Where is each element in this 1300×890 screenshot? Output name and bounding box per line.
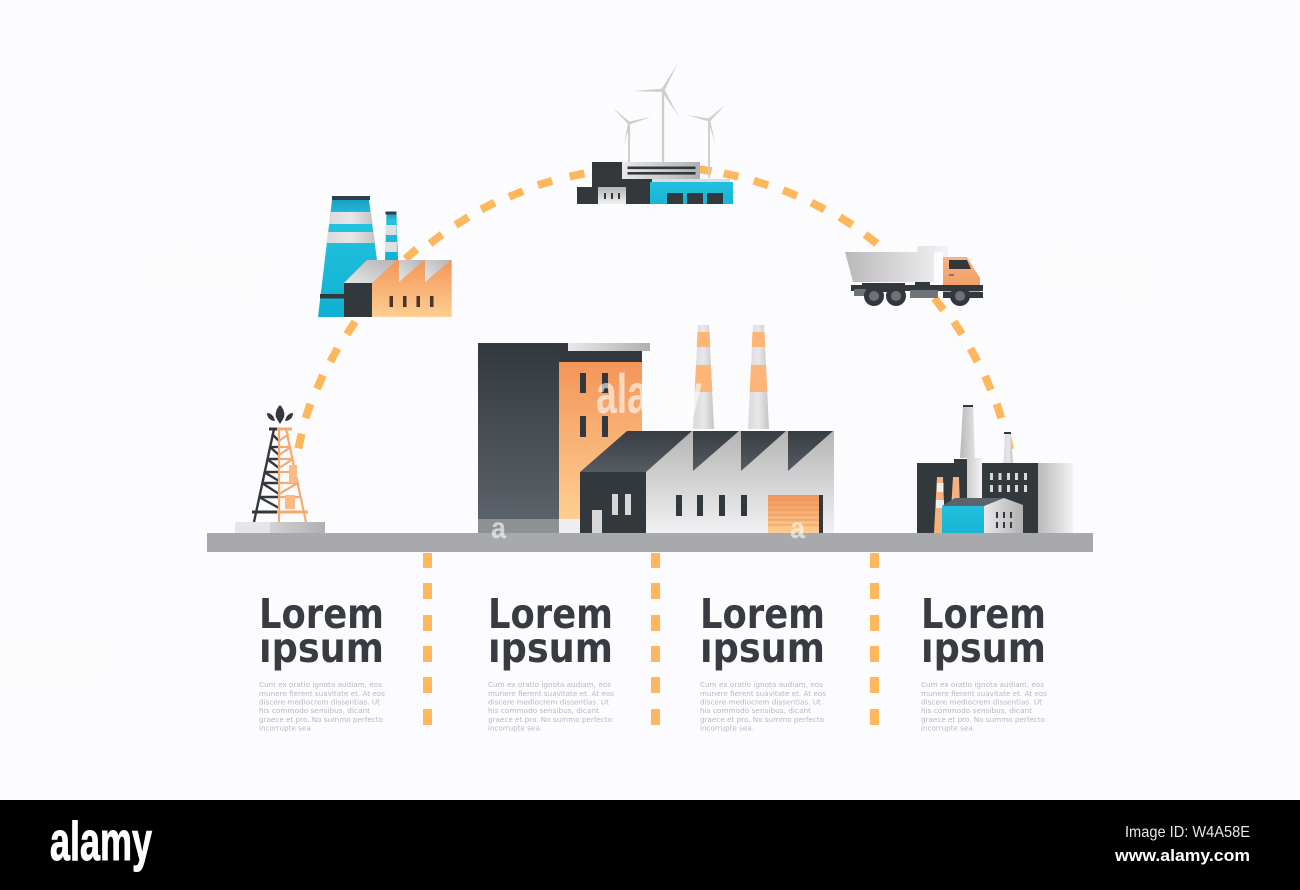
text block 4: incorrupte sea. (921, 724, 975, 732)
text block 3: ipsum (700, 624, 825, 672)
dashed arc connecting the stages (294, 165, 1014, 449)
dashed divider 1 (423, 553, 432, 725)
text block 1: Cum ex oratio ignota audiam, eos (259, 681, 382, 689)
icon: wind-powered plant (577, 63, 733, 204)
text block 2: his commodo sensibus, dicant (488, 707, 599, 715)
watermarks: alamy (150, 234, 260, 297)
ground platform (207, 533, 1093, 552)
icon: refinery with cooling tower (318, 196, 452, 317)
text block 4: munere fierent suavitate et. At eos (921, 690, 1047, 698)
text block 3 (700, 590, 826, 732)
icon: dump truck (845, 246, 983, 306)
text block 1: Lorem (259, 590, 384, 638)
text block 3: his commodo sensibus, dicant (700, 707, 811, 715)
site url: www.alamy.com (1114, 846, 1250, 865)
text block 4: his commodo sensibus, dicant (921, 707, 1032, 715)
footer bar (0, 800, 1300, 890)
text block 2: Cum ex oratio ignota audiam, eos (488, 681, 611, 689)
text block 3: Lorem (700, 590, 825, 638)
watermarks: a (790, 512, 805, 545)
text block 1: graece et pro. No summo perfecto (259, 716, 383, 724)
icon: small processing plant (917, 405, 1073, 533)
text block 2: graece et pro. No summo perfecto (488, 716, 612, 724)
text block 4: Cum ex oratio ignota audiam, eos (921, 681, 1044, 689)
text block 4: discere mediocrem dissentias. Ut (921, 698, 1042, 706)
dashed divider 3 (870, 553, 879, 725)
text block 1: discere mediocrem dissentias. Ut (259, 698, 380, 706)
text block 4: graece et pro. No summo perfecto (921, 716, 1045, 724)
text block 3: discere mediocrem dissentias. Ut (700, 698, 821, 706)
text block 2: incorrupte sea. (488, 724, 542, 732)
watermarks (0, 234, 1150, 687)
text block 2: Lorem (488, 590, 613, 638)
text block 2 (488, 590, 614, 732)
icon: oil derrick (235, 405, 325, 533)
text block 2: discere mediocrem dissentias. Ut (488, 698, 609, 706)
text block 2: ipsum (488, 624, 613, 672)
text block 1: munere fierent suavitate et. At eos (259, 690, 385, 698)
watermarks: a (491, 512, 506, 545)
dashed divider 2 (651, 553, 660, 725)
text block 3: munere fierent suavitate et. At eos (700, 690, 826, 698)
icon: main factory (478, 325, 834, 533)
image id: Image ID: W4A58E (1125, 824, 1250, 841)
footer logo: alamy (50, 810, 152, 872)
text block 3: Cum ex oratio ignota audiam, eos (700, 681, 823, 689)
text block 1 (259, 590, 385, 732)
text block 4: ipsum (921, 624, 1046, 672)
watermarks: alamy (596, 362, 702, 425)
text block 1: his commodo sensibus, dicant (259, 707, 370, 715)
text block 3: incorrupte sea. (700, 724, 754, 732)
text block 2: munere fierent suavitate et. At eos (488, 690, 614, 698)
text block 4: Lorem (921, 590, 1046, 638)
watermarks: alamy (0, 624, 105, 687)
text block 3: graece et pro. No summo perfecto (700, 716, 824, 724)
watermarks: alamy (1040, 234, 1150, 297)
text block 4 (921, 590, 1047, 732)
text block 1: ipsum (259, 624, 384, 672)
text block 1: incorrupte sea. (259, 724, 313, 732)
